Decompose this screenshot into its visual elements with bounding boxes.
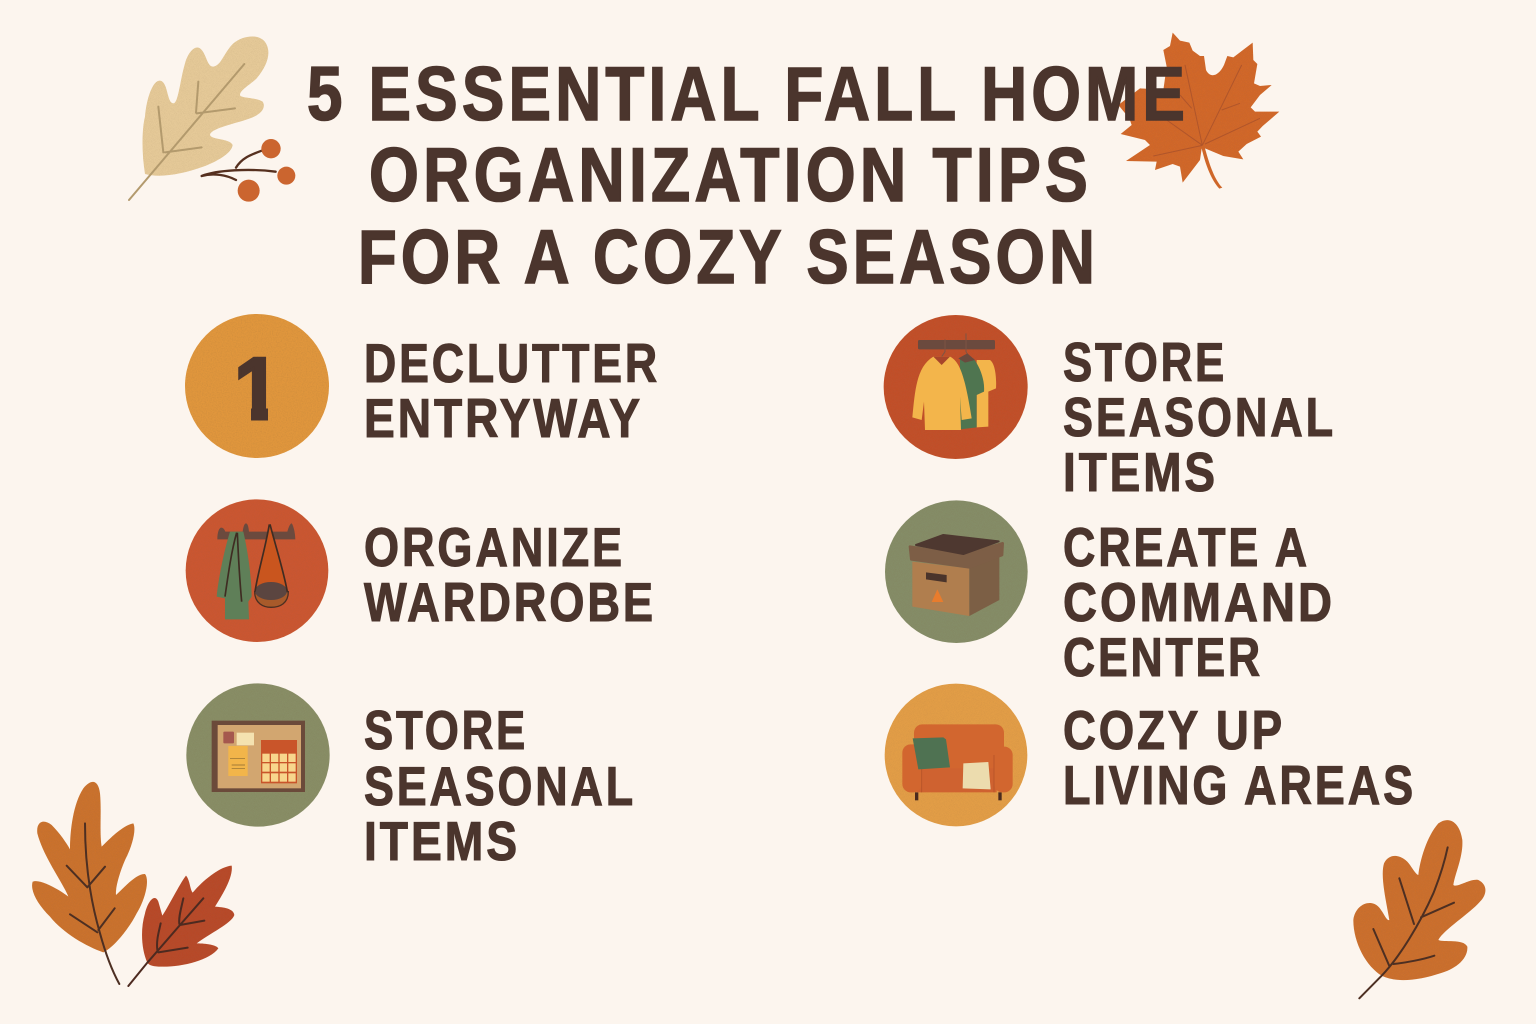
text: store seasonal items left: STORE (364, 699, 528, 761)
text: store seasonal items left (364, 699, 636, 872)
text: create a command center: CREATE A (1063, 516, 1310, 578)
text: create a command center: CENTER (1063, 626, 1263, 688)
icon: bottom-left autumn leaves (32, 782, 234, 986)
text: declutter entryway: ENTRYWAY (364, 387, 643, 449)
icon: sofa with cushions (885, 684, 1027, 826)
text: create a command center (1063, 516, 1335, 688)
text: store seasonal items left: ITEMS (364, 810, 520, 872)
text: store seasonal items right: SEASONAL (1063, 386, 1336, 448)
icon: orange maple leaf (1118, 33, 1279, 189)
text: create a command center: COMMAND (1063, 571, 1335, 633)
icon: tan oak leaf with berries (129, 36, 295, 202)
text: organize wardrobe (364, 516, 656, 633)
title: 5 ESSENTIAL FALL HOME (307, 52, 1189, 137)
icon: number 1 badge: 1 (234, 339, 280, 438)
text: cozy up living areas: COZY UP (1063, 699, 1285, 761)
text: declutter entryway (364, 332, 660, 449)
text: store seasonal items right: STORE (1063, 331, 1227, 393)
icon: storage box (885, 500, 1028, 643)
icon: command board with calendar (186, 683, 330, 827)
text: cozy up living areas (1063, 699, 1416, 816)
text: organize wardrobe: WARDROBE (364, 571, 656, 633)
text: store seasonal items right: ITEMS (1063, 441, 1218, 503)
title: FOR A COZY SEASON (358, 215, 1099, 300)
text: store seasonal items left: SEASONAL (364, 755, 636, 817)
icon: bottom-right oak leaf (1353, 820, 1485, 998)
title (307, 52, 1189, 300)
text: store seasonal items right (1063, 331, 1336, 503)
title: ORGANIZATION TIPS (369, 133, 1092, 218)
text: declutter entryway: DECLUTTER (364, 332, 660, 394)
icon: wall hooks with towel and bag (186, 499, 328, 642)
icon: clothes on rail (884, 315, 1028, 459)
icon: number 1 badge (185, 314, 329, 458)
text: cozy up living areas: LIVING AREAS (1063, 754, 1416, 816)
text: organize wardrobe: ORGANIZE (364, 516, 625, 578)
